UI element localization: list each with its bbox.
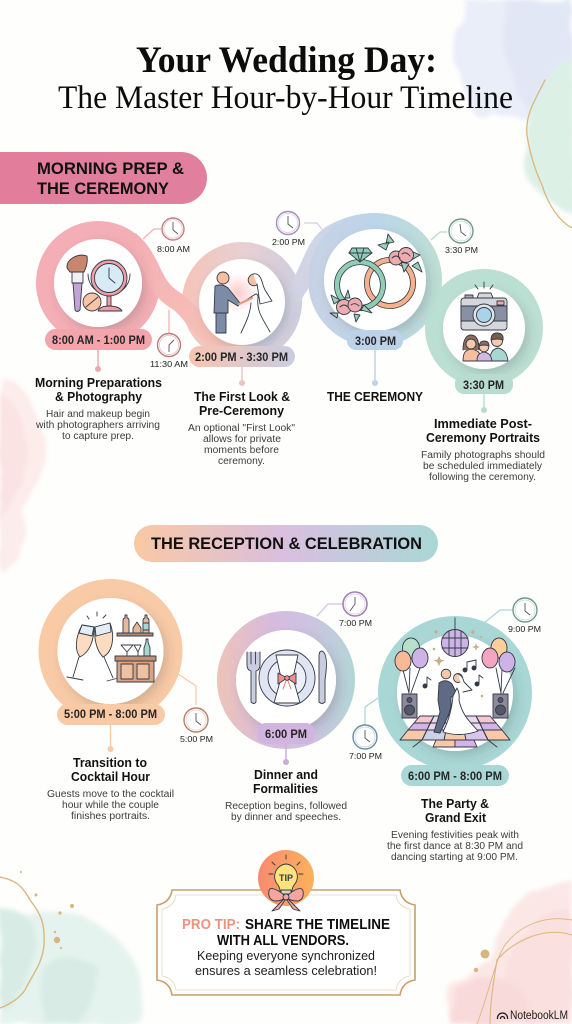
- clock: 8:00 AM: 8:00 AM: [157, 244, 190, 254]
- panel: cocktail ring: [48, 588, 173, 714]
- step: the party and grand exit: dancing starting at 9:00 PM.: [391, 852, 518, 863]
- callout: pro tip: SHARE THE TIMELINE: [245, 917, 390, 933]
- step: post-ceremony portraits: Immediate Post-: [434, 417, 532, 431]
- step: morning preparations: with photographers arriving: [35, 420, 160, 431]
- step: the party and grand exit: Evening festivities peak with: [391, 830, 519, 841]
- clock: 5:00 PM: [178, 674, 213, 744]
- clock: 7:00 PM lower: 7:00 PM: [349, 751, 382, 761]
- panel: ceremony timeline ribbon: [45, 221, 534, 378]
- step: dinner and formalities: [225, 723, 347, 823]
- callout: pro tip: Keeping everyone synchronized: [197, 949, 375, 963]
- step: the party and grand exit: 6:00 PM - 8:00 PM: [408, 771, 502, 783]
- callout: pro tip: ensures a seamless celebration!: [195, 964, 377, 978]
- step: first look: 2:00 PM - 3:30 PM: [195, 352, 288, 364]
- icon: place setting: [247, 650, 326, 706]
- icon: dance floor with disco ball and balloons: [395, 618, 515, 747]
- icon: tip light bulb with bow: [258, 850, 314, 911]
- clock: 7:00 PM top: 7:00 PM: [339, 618, 372, 628]
- section banner: morning prep and the ceremony: MORNING PREP &: [37, 159, 184, 178]
- title: The Master Hour-by-Hour Timeline: [58, 80, 513, 116]
- step: morning preparations: [35, 329, 162, 442]
- step: the party and grand exit: Grand Exit: [425, 811, 487, 825]
- title: [58, 40, 513, 116]
- icon: champagne flutes and bar: [67, 612, 156, 682]
- clock: 2:00 PM: [272, 212, 325, 247]
- step: first look: moments before: [204, 445, 279, 456]
- clock: 11:30 AM: [150, 310, 188, 369]
- sparkles: [433, 630, 483, 697]
- step: morning preparations: Morning Preparations: [35, 376, 162, 390]
- icon: wedding rings: [330, 234, 422, 322]
- callout: pro tip: PRO TIP:: [182, 917, 240, 933]
- clock: 11:30 AM: 11:30 AM: [150, 359, 188, 369]
- icon: tip light bulb with bow: TIP: [279, 873, 293, 883]
- step: morning preparations: Hair and makeup begin: [46, 409, 150, 420]
- step: morning preparations: & Photography: [55, 390, 142, 404]
- step: the party and grand exit: the first dance at 8:30 PM and: [387, 841, 523, 852]
- icon: makeup brush and mirror: [67, 255, 130, 312]
- step: the ceremony: [327, 330, 424, 404]
- step: first look: [188, 346, 295, 467]
- step: transition to cocktail hour: 5:00 PM - 8:00 PM: [64, 709, 157, 721]
- icon: first look couple: [214, 272, 272, 333]
- step: transition to cocktail hour: finishes portraits.: [71, 811, 150, 822]
- clock: 9:00 PM: 9:00 PM: [508, 624, 541, 634]
- step: the ceremony: THE CEREMONY: [327, 390, 424, 404]
- clock: 8:00 AM: [143, 218, 190, 254]
- callout: pro tip: [157, 890, 415, 995]
- step: first look: An optional "First Look": [188, 423, 295, 434]
- step: first look: Pre-Ceremony: [199, 404, 284, 418]
- step: the party and grand exit: [387, 765, 523, 863]
- clock: 7:00 PM lower: [349, 698, 382, 761]
- step: morning preparations: 8:00 AM - 1:00 PM: [52, 335, 145, 347]
- step: the ceremony: 3:00 PM: [355, 336, 396, 348]
- step: post-ceremony portraits: Family photographs should: [421, 450, 545, 461]
- clock: 9:00 PM: [484, 598, 541, 634]
- step: transition to cocktail hour: [47, 704, 174, 822]
- step: dinner and formalities: 6:00 PM: [265, 729, 307, 741]
- step: first look: ceremony.: [218, 456, 265, 467]
- step: dinner and formalities: Dinner and: [254, 768, 318, 782]
- step: the party and grand exit: The Party &: [421, 797, 489, 811]
- step: transition to cocktail hour: Cocktail Hour: [71, 770, 150, 784]
- step: first look: allows for private: [203, 434, 281, 445]
- section banner: the reception and celebration: [134, 525, 438, 562]
- step: dinner and formalities: Formalities: [253, 782, 318, 796]
- step: first look: The First Look &: [194, 390, 290, 404]
- clock: 3:30 PM: 3:30 PM: [445, 245, 478, 255]
- step: post-ceremony portraits: Ceremony Portraits: [426, 431, 540, 445]
- clock: 2:00 PM: 2:00 PM: [272, 237, 305, 247]
- step: transition to cocktail hour: hour while the couple: [62, 800, 159, 811]
- panel: dinner ring: [226, 620, 346, 740]
- section banner: the reception and celebration: THE RECEPTION & CELEBRATION: [151, 534, 422, 553]
- title: Your Wedding Day:: [136, 40, 437, 81]
- clock: 3:30 PM: [431, 219, 478, 255]
- step: post-ceremony portraits: 3:30 PM: [463, 380, 504, 392]
- step: dinner and formalities: by dinner and speeches.: [231, 812, 341, 823]
- section banner: morning prep and the ceremony: THE CEREMONY: [37, 179, 170, 198]
- panel: party ring: [388, 626, 522, 760]
- step: transition to cocktail hour: Transition to: [73, 756, 147, 770]
- clock: 7:00 PM top: [317, 592, 372, 628]
- callout: pro tip: WITH ALL VENDORS.: [217, 933, 349, 949]
- step: post-ceremony portraits: following the ceremony.: [429, 472, 536, 483]
- step: post-ceremony portraits: [421, 374, 545, 483]
- clock: 5:00 PM: 5:00 PM: [180, 734, 213, 744]
- section banner: morning prep and the ceremony: [0, 152, 207, 204]
- step: morning preparations: to capture prep.: [62, 431, 134, 442]
- icon: camera and family: [461, 282, 508, 361]
- step: post-ceremony portraits: be scheduled immediately: [423, 461, 542, 472]
- step: transition to cocktail hour: Guests move to the cocktail: [47, 789, 174, 800]
- step: dinner and formalities: Reception begins, followed: [225, 801, 347, 812]
